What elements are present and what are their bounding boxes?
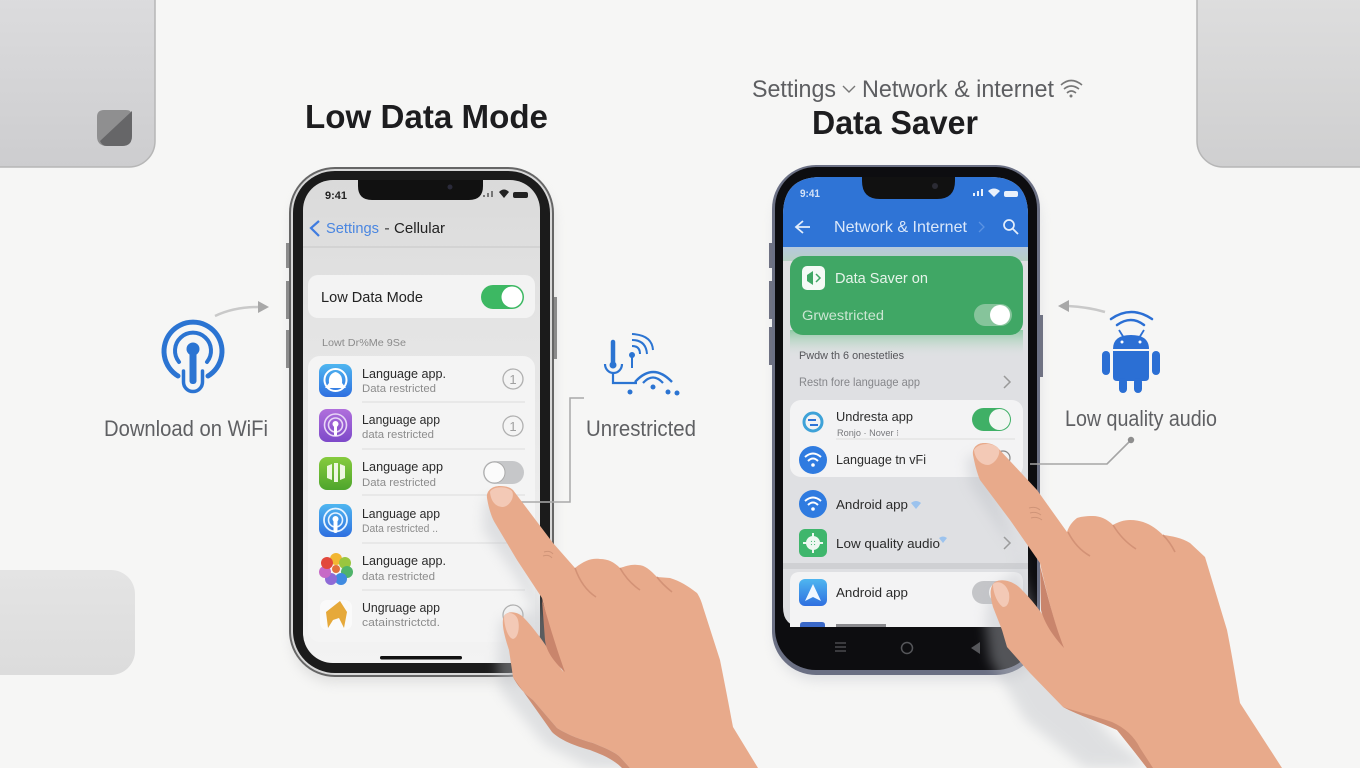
nav bar: Settings Cellular: Cellular (394, 221, 445, 237)
app row 1: Data restricted (362, 383, 436, 395)
arrow: to right phone (1058, 300, 1105, 312)
app row: Language WiFi (799, 446, 1010, 474)
app row 6: catainstrictctd. (362, 617, 440, 629)
icon: data saver (802, 266, 825, 290)
app row 2: 1 (509, 419, 517, 434)
phone side buttons (286, 243, 557, 368)
app row 2: data restricted (362, 429, 434, 441)
app row 2: Language app (362, 413, 440, 427)
app row: Language WiFi: Language tn ᴠFi (836, 452, 926, 467)
hand shadow (966, 452, 1150, 768)
phone screen (783, 177, 1028, 627)
green card: Data Saver on: Grwestricted (802, 308, 884, 323)
app row: Android app (799, 490, 921, 518)
wrist shading (513, 677, 630, 768)
app row 1: 1 (509, 372, 517, 387)
app row: Low quality audio (799, 529, 1010, 557)
app row 3 with off toggle (319, 457, 524, 490)
app row 5 photos icon (319, 553, 446, 585)
connector: right phone to Low quality audio (1030, 437, 1134, 464)
hand shadow (483, 496, 640, 768)
row dividers (362, 402, 525, 590)
app row: Undresta app: Undresta app (836, 409, 913, 424)
nav bar: Settings Cellular (303, 221, 540, 247)
knuckle lines (1068, 525, 1175, 556)
app row 5 photos icon: Language app. (362, 554, 446, 568)
hand: right, tapping row (966, 443, 1282, 768)
app row: Android app: Android app (836, 497, 908, 512)
section label: Lowt Dr%Me 9Se (322, 337, 406, 349)
phone frame (772, 165, 1040, 675)
hand shape (487, 486, 758, 768)
knuckle lines (575, 568, 672, 597)
app row 5 photos icon: data restricted (362, 571, 435, 583)
partial app row (800, 622, 886, 627)
app row 4: Language app (362, 507, 440, 521)
row: Low Data Mode toggle: Low Data Mode (321, 290, 423, 306)
app row 4 (319, 504, 440, 537)
app row: Low quality audio: Low quality audio (836, 536, 940, 551)
restrict language row (799, 375, 1010, 389)
app row: Android app lower: Android app (836, 585, 908, 600)
finger creases (1029, 507, 1042, 520)
decorative card: bottom left (0, 570, 135, 675)
hand: left, tapping toggle (483, 486, 758, 768)
hand shape (973, 443, 1282, 768)
icon: shield on card (97, 110, 132, 146)
index fingernail (974, 444, 999, 465)
phone: iPhone Low Data Mode (286, 167, 557, 677)
android nav bar (835, 642, 980, 654)
row: Low Data Mode toggle (308, 275, 535, 318)
icon: download on WiFi (164, 322, 222, 392)
icon: unrestricted network (605, 334, 680, 396)
heading: Data Saver: Data Saver (812, 104, 978, 141)
breadcrumb: Settings Network and internet: Network & internet (862, 76, 1054, 103)
restrict language row: Restn fore language app (799, 375, 920, 389)
thumb nail (993, 582, 1009, 607)
notch (862, 177, 955, 199)
blue header (783, 177, 1028, 247)
divider band (783, 563, 1028, 569)
blue header: 9:41 (800, 188, 820, 200)
blue header: Network & Internet (834, 219, 968, 236)
label: Low quality audio: Low quality audio (1065, 406, 1217, 431)
thumb web shading (542, 600, 565, 672)
green glow below card (790, 330, 1023, 358)
phone side buttons (769, 243, 1043, 377)
index fingernail (490, 487, 513, 507)
app row 3 with off toggle: Language app (362, 460, 443, 474)
heading: Low Data Mode: Low Data Mode (305, 98, 548, 135)
notch (358, 180, 483, 200)
app row: Undresta app (804, 408, 1015, 439)
app row 6: Ungruage app (362, 601, 440, 615)
green card: Data Saver on (790, 256, 1023, 335)
green card: Data Saver on: Data Saver on (835, 271, 928, 287)
label: Download on WiFi: Download on WiFi (104, 416, 268, 441)
header fade band (783, 247, 1028, 261)
app list card (308, 356, 535, 642)
decorative card: top left (0, 0, 155, 167)
status bar (325, 190, 528, 202)
app row 3 with off toggle: Data restricted (362, 477, 436, 489)
phone: Android Data Saver (769, 165, 1043, 675)
arrow: to left phone (215, 301, 269, 316)
white card rows (790, 400, 1023, 477)
phone shadows (292, 178, 1040, 683)
decorative card: top right (1197, 0, 1360, 167)
app row 2 (319, 409, 523, 442)
nav bar: Settings Cellular: Settings (326, 221, 379, 237)
breadcrumb: Settings Network and internet (752, 76, 1082, 103)
app row: Undresta app: Ronjo · Nover ⁝ (837, 428, 899, 438)
wrist shading (1063, 707, 1153, 768)
app row 6 (320, 600, 523, 630)
breadcrumb: Settings Network and internet: Settings (752, 76, 836, 103)
app row 1 (319, 364, 523, 397)
white card lower (790, 572, 1023, 627)
connector: left phone to Unrestricted (505, 398, 584, 502)
phone frame (289, 167, 554, 677)
app row 4: Data restricted .. (362, 523, 438, 535)
finger creases (543, 551, 553, 558)
label: Unrestricted: Unrestricted (586, 416, 696, 441)
thumb nail (504, 613, 519, 639)
section label: Pwdw th 6 onestetlies (799, 350, 904, 362)
icon: android with wifi (1102, 312, 1160, 393)
home indicator (380, 656, 462, 660)
app row 1: Language app. (362, 367, 446, 381)
status bar: 9:41 (325, 190, 347, 202)
app row: Android app lower (799, 579, 1010, 606)
phone screen (303, 180, 540, 663)
thumb web shading (1040, 566, 1064, 648)
